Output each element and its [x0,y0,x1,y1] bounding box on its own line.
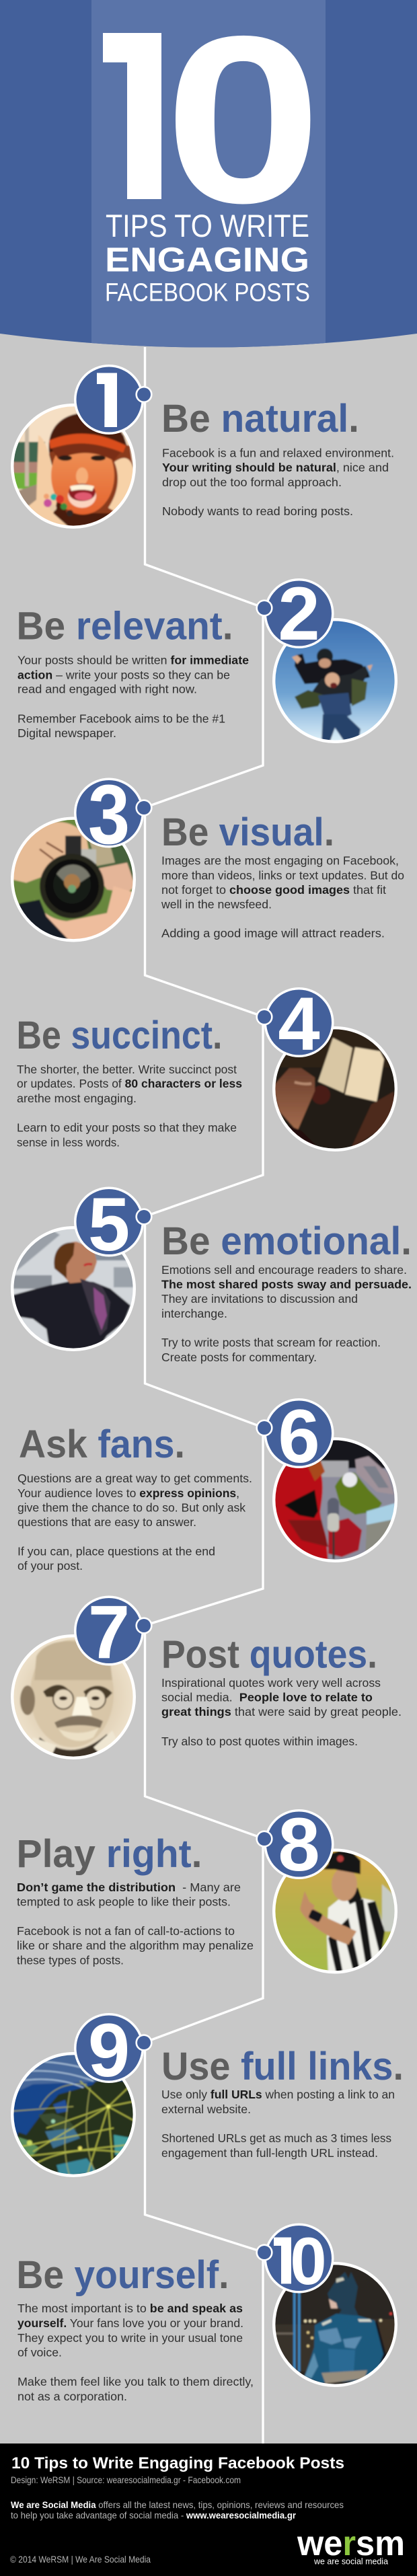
number badge 8: 8 [278,1803,320,1887]
photo: tiny open book [272,1026,397,1151]
body text: Emotions sell and encourage readers to share. [161,1263,407,1277]
body text: Adding a good image will attract readers. [161,927,385,940]
body text: questions that are easy to answer. [17,1515,196,1529]
body text: The most important is to be and speak as [17,2302,243,2315]
body text: yourself. Your fans love you or your brand. [17,2316,243,2330]
logo: wersm: we are social media [313,2556,389,2567]
number badge 6: 6 [278,1394,320,1478]
photo: puppets at microphone [272,1437,397,1562]
number badge 6 [264,1394,334,1478]
footer title: 10 Tips to Write Engaging Facebook Posts [11,2454,344,2472]
photo: networked globe [11,2052,136,2177]
body text [17,1063,242,1149]
body text: give them the chance to do so. But only ask [17,1501,245,1515]
connector dot [135,1617,153,1634]
title line: engaging: ENGAGING [105,241,309,278]
body text: interchange. [161,1307,227,1320]
body text: Your posts should be written for immediate [17,654,249,667]
body text: more than videos, links or text updates. But do [161,868,404,882]
photo: camera lens [11,817,136,942]
title line: facebook posts: FACEBOOK POSTS [105,278,310,307]
body text: Try also to post quotes within images. [161,1735,358,1748]
body text [161,1676,402,1748]
body text: read and engaged with right now. [17,683,197,696]
heading: Be visual. [161,810,334,854]
heading: Be emotional. [161,1219,412,1263]
body text: engagement than full-length URL instead. [161,2146,378,2160]
body text: Digital newspaper. [17,726,116,740]
heading: Be yourself. [16,2253,229,2297]
copyright: © 2014 WeRSM | We Are Social Media [10,2554,151,2565]
tip 2: be relevant [16,572,397,743]
body text [17,2302,254,2403]
body text [161,1263,412,1364]
tip 4: be succinct [16,982,397,1151]
connector dot [135,386,153,403]
photo: skydivers [272,618,397,743]
tip 3: be visual [11,767,404,942]
body text: action – write your posts so they can be [17,668,230,681]
tip 10: be yourself [16,2218,397,2403]
body text: great things that were said by great people. [161,1705,402,1718]
body text: of voice. [17,2346,62,2359]
photo: referee [272,1848,397,1973]
logo: wersm: wersm [297,2524,405,2563]
heading: Be relevant. [16,604,233,648]
number badge 4: 4 [278,982,320,1066]
body text: Learn to edit your posts so that they make [17,1121,237,1135]
body text: social media. People love to relate to [161,1691,373,1704]
about text: We are Social Media offers all the latest news, tips, opinions, reviews and resources [11,2499,344,2510]
body text: The shorter, the better. Write succinct post [17,1063,237,1076]
body text: Your audience loves to express opinions, [17,1486,239,1500]
photo: gandhi portrait [11,1634,136,1759]
body text [17,1881,254,1967]
header banner [0,0,417,363]
number badge 1 [74,365,144,434]
tip 9: use full links [11,2008,404,2177]
heading: Use full links. [161,2045,404,2088]
number badge 10: 0 [290,2224,327,2298]
number badge 1: 1 [91,360,124,444]
body text: external website. [161,2103,251,2116]
number badge 9: 9 [88,2008,130,2092]
body text: Try to write posts that scream for reaction. [161,1336,381,1349]
body text: or updates. Posts of 80 characters or less [17,1077,242,1090]
number badge 10 [264,2224,334,2294]
body text: Make them feel like you talk to them directly, [17,2375,254,2388]
connector dot [256,599,273,617]
body text: these types of posts. [17,1953,124,1967]
body text: Questions are a great way to get comments. [17,1472,252,1485]
body text: Inspirational quotes work very well across [161,1676,381,1690]
body text: Remember Facebook aims to be the #1 [17,712,225,725]
body text [162,447,394,518]
number badge 10: 1 [270,2218,295,2300]
body text: well in the newsfeed. [161,897,272,911]
body text [17,1472,252,1573]
body text: Your writing should be natural , nice and [162,461,389,474]
body text: Images are the most engaging on Facebook, [161,854,399,868]
body text: drop out the too formal approach. [162,476,342,489]
body text: The most shared posts sway and persuade. [161,1278,412,1291]
number badge 5: 5 [88,1182,130,1266]
connector dot [256,1008,273,1026]
credits: Design: WeRSM | Source: wearesocialmedia.gr - Facebook.com [11,2474,241,2485]
body text: If you can, place questions at the end [17,1544,215,1558]
body text: Create posts for commentary. [161,1351,317,1364]
connector dot [135,799,153,817]
number badge 2: 2 [278,572,320,656]
tip 5: be emotional [11,1182,412,1364]
heading: Be natural. [161,397,359,441]
heading: Play right. [16,1832,202,1876]
number badge 2 [264,572,334,656]
body text: Facebook is a fun and relaxed environment. [162,447,394,460]
body text: Nobody wants to read boring posts. [162,504,353,518]
body text: Shortened URLs get as much as 3 times less [161,2131,391,2145]
number badge 4 [264,982,334,1066]
body text [161,854,404,940]
body text: not forget to choose good images that fit [161,883,386,897]
body text: arethe most engaging. [17,1092,137,1105]
about text [11,2499,344,2521]
heading: Post quotes. [161,1633,377,1676]
body text: sense in less words. [17,1135,120,1149]
body text: Use only full URLs when posting a link to an [161,2088,395,2101]
body text: Facebook is not a fan of call-to-actions to [17,1924,235,1938]
footer [0,2444,417,2576]
big number 10 [103,33,311,204]
heading: Ask fans. [19,1423,185,1466]
number badge 3 [74,767,144,862]
photo: joyful businessman [11,1226,136,1351]
body text: Don’t game the distribution - Many are [17,1881,241,1894]
tip 7: post quotes [11,1590,402,1759]
connector path [144,347,264,2444]
tip 8: play right [16,1803,397,1973]
body text [17,654,249,740]
number badge 7 [74,1590,144,1674]
body text [161,2088,395,2160]
tip 1: be natural [11,360,394,529]
body text: of your post. [17,1559,83,1573]
photo: batman [272,2262,397,2387]
number badge 8 [264,1803,334,1887]
number badge 3: 3 [88,767,130,862]
connector dot [256,2244,273,2261]
number badge 7: 7 [88,1590,130,1674]
body text: not as a corporation. [17,2390,127,2403]
body text: They are invitations to discussion and [161,1292,358,1305]
number badge 5 [74,1182,144,1266]
body text: like or share and the algorithm may penalize [17,1939,254,1953]
body text: They expect you to write in your usual tone [17,2331,243,2345]
photo: excited woman [11,404,136,529]
connector dot [135,2034,153,2051]
heading: Be succinct. [16,1014,222,1057]
connector dot [256,1830,273,1848]
about text: to help you take advantage of social media - www.wearesocialmedia.gr [11,2510,297,2521]
body text: tempted to ask people to like their posts. [17,1895,231,1909]
tip 6: ask fans [17,1394,397,1573]
connector dot [256,1419,273,1437]
title line: tips to write: TIPS TO WRITE [106,208,309,243]
connector dot [135,1208,153,1225]
number badge 9 [74,2008,144,2092]
